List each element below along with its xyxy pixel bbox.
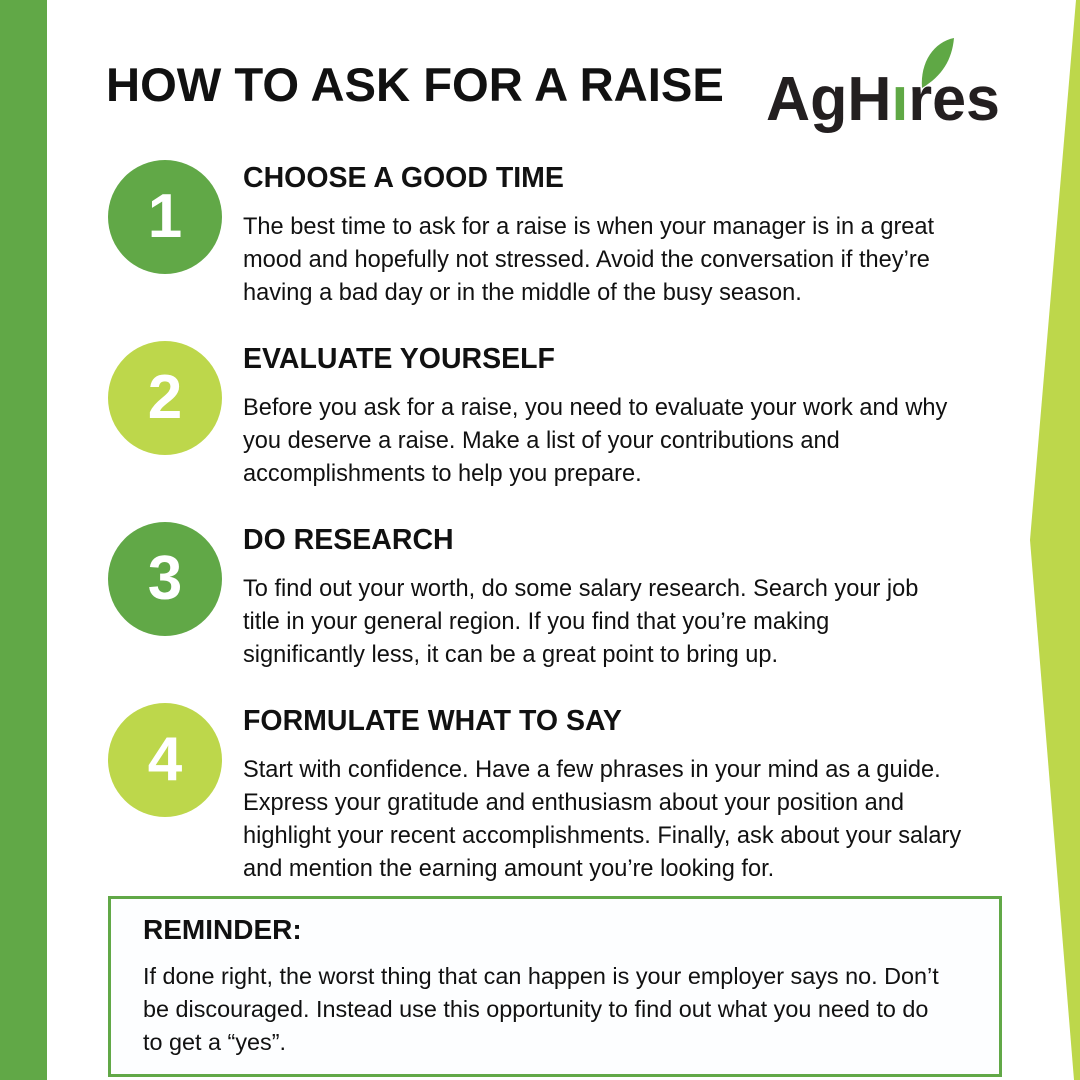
step 1: mood and hopefully not stressed. Avoid the conversation if they’re xyxy=(243,247,930,273)
step 1 xyxy=(108,160,934,306)
step 2: EVALUATE YOURSELF xyxy=(243,343,555,375)
step 1: CHOOSE A GOOD TIME xyxy=(243,162,564,194)
reminder text xyxy=(143,963,939,1055)
step 4: Start with confidence. Have a few phrases in your mind as a guide. xyxy=(243,757,941,783)
reminder heading: REMINDER: xyxy=(143,914,302,945)
step 4: 4 xyxy=(148,725,182,794)
step 1: having a bad day or in the middle of the busy season. xyxy=(243,280,802,306)
step 1: 1 xyxy=(148,182,182,251)
title: HOW TO ASK FOR A RAISE xyxy=(106,59,724,112)
step 2 xyxy=(108,341,948,487)
step 4: Express your gratitude and enthusiasm about your position and xyxy=(243,790,904,816)
step 4: and mention the earning amount you’re looking for. xyxy=(243,856,774,882)
step 3: To find out your worth, do some salary research. Search your job xyxy=(243,576,918,602)
step 3 xyxy=(108,522,918,668)
logo: AgHıres xyxy=(766,65,1000,134)
step 2: accomplishments to help you prepare. xyxy=(243,461,642,487)
step 2: Before you ask for a raise, you need to evaluate your work and why xyxy=(243,395,947,421)
reminder text: If done right, the worst thing that can happen is your employer says no. Don’t xyxy=(143,963,939,989)
step 2: you deserve a raise. Make a list of your contributions and xyxy=(243,428,840,454)
step 3: title in your general region. If you find that you’re making xyxy=(243,609,829,635)
step 4: highlight your recent accomplishments. Finally, ask about your salary xyxy=(243,823,961,849)
step 2: 2 xyxy=(148,363,182,432)
step 3: significantly less, it can be a great point to bring up. xyxy=(243,642,778,668)
reminder text: be discouraged. Instead use this opportunity to find out what you need to do xyxy=(143,996,928,1022)
step 1: The best time to ask for a raise is when your manager is in a great xyxy=(243,214,934,240)
step 4 xyxy=(108,703,962,882)
reminder text: to get a “yes”. xyxy=(143,1029,286,1055)
step 3: DO RESEARCH xyxy=(243,524,454,556)
left green bar xyxy=(0,0,47,1080)
reminder box xyxy=(108,896,1002,1077)
step 3: 3 xyxy=(148,544,182,613)
step 4: FORMULATE WHAT TO SAY xyxy=(243,705,622,737)
